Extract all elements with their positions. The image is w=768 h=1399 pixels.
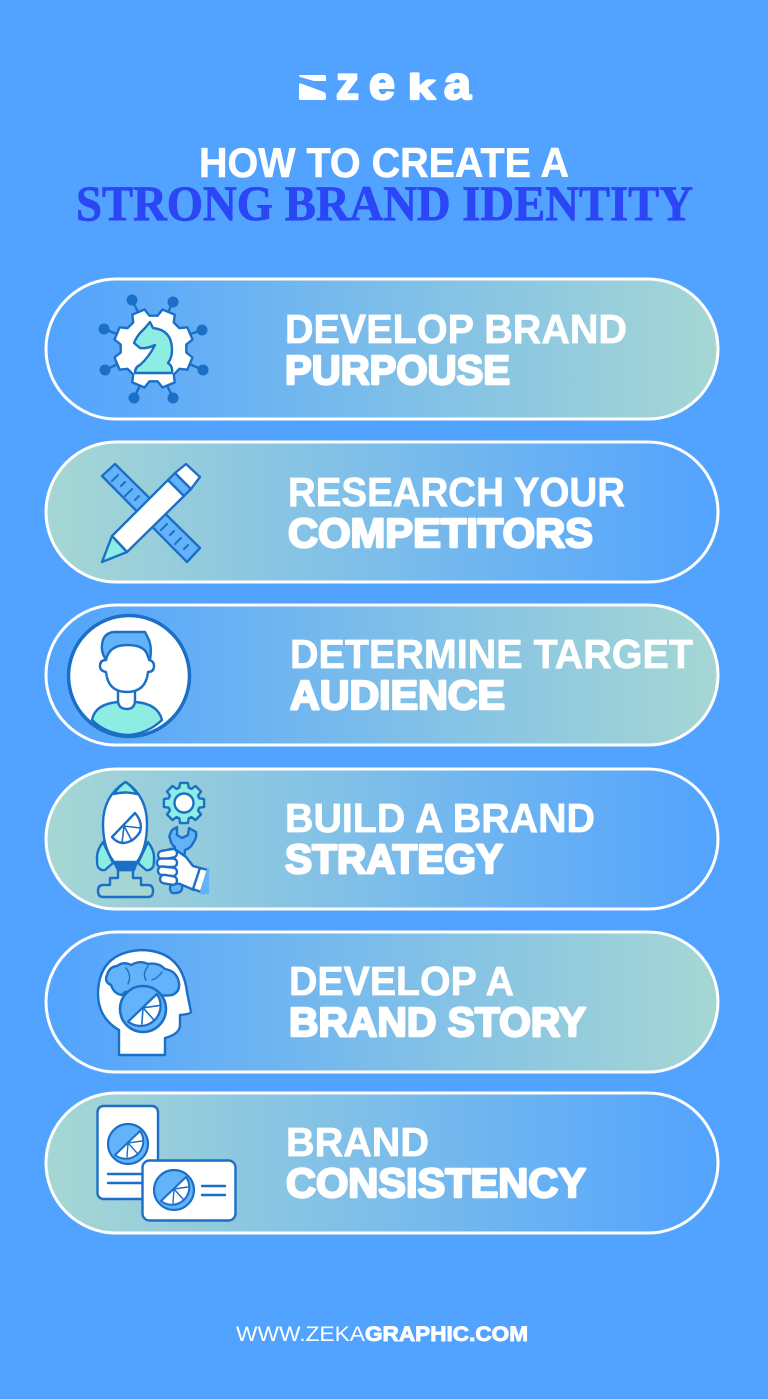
icon: head with brain <box>98 950 191 1055</box>
label: develop brand purpouse: PURPOUSE <box>285 347 510 393</box>
panel: research your competitors <box>46 442 718 582</box>
title <box>76 139 693 231</box>
label: research your competitors: COMPETITORS <box>288 510 593 556</box>
label: research your competitors: RESEARCH YOUR <box>288 469 625 515</box>
icon: gear with chess knight <box>98 294 208 404</box>
logo: zeka: e <box>369 57 395 109</box>
logo: zeka: z <box>336 57 359 109</box>
label: brand consistency: BRAND <box>286 1119 429 1165</box>
label: develop brand purpouse: DEVELOP BRAND <box>285 306 627 352</box>
icon: person avatar <box>68 616 190 736</box>
panel: brand consistency <box>46 1093 718 1233</box>
logo: zeka: k <box>408 68 436 107</box>
panel: build a brand strategy <box>46 769 718 909</box>
footer website <box>236 1323 528 1346</box>
label: brand consistency <box>286 1119 586 1206</box>
label: determine target audience <box>290 631 693 718</box>
icon: rocket, gear and wrench <box>97 782 208 897</box>
footer website: WWW.ZEKA <box>236 1323 365 1346</box>
title: STRONG BRAND IDENTITY <box>76 175 693 231</box>
icon: brand cards <box>98 1106 236 1220</box>
label: develop brand purpouse <box>285 306 627 393</box>
label: develop a brand story: DEVELOP A <box>289 958 514 1004</box>
footer website: GRAPHIC.COM <box>365 1323 528 1346</box>
label: build a brand strategy: BUILD A BRAND <box>285 795 595 841</box>
icon: pencil and ruler <box>102 464 200 562</box>
label: determine target audience: DETERMINE TARGET <box>290 631 693 677</box>
label: build a brand strategy <box>285 795 595 882</box>
title: HOW TO CREATE A <box>199 139 569 186</box>
label: develop a brand story: BRAND STORY <box>289 999 586 1045</box>
logo: zeka <box>299 57 471 109</box>
logo: zeka: a <box>444 57 471 109</box>
label: build a brand strategy: STRATEGY <box>285 836 503 882</box>
label: develop a brand story <box>289 958 586 1045</box>
label: research your competitors <box>288 469 625 556</box>
panel: develop a brand story <box>46 932 718 1072</box>
label: brand consistency: CONSISTENCY <box>286 1160 586 1206</box>
panel: develop brand purpouse <box>46 279 718 419</box>
label: determine target audience: AUDIENCE <box>290 672 505 718</box>
panel: determine target audience <box>46 605 718 745</box>
